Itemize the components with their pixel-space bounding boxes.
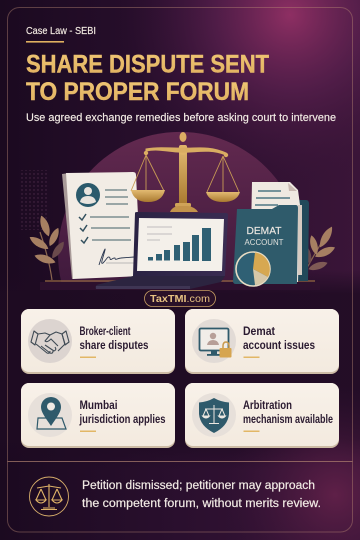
accent rule [244,430,260,432]
icon: handshake [28,319,72,363]
folder: demat account: ACCOUNT [244,238,284,247]
card text [243,400,333,426]
panel: broker-client [21,309,175,374]
card text: account issues [243,340,315,352]
accent rule [244,356,260,358]
subtitle: Use agreed exchange remedies before asking court to intervene [26,112,336,124]
card text: Broker-client [80,326,131,338]
icon: shield with scales [192,393,236,437]
title: SHARE DISPUTE SENT [26,50,269,78]
table surface [45,280,315,282]
folder: demat account [233,182,309,286]
conclusion text [82,480,321,510]
card text: Demat [243,326,275,338]
accent rule [80,356,96,358]
card text [243,326,315,352]
folder label: DEMAT [246,225,282,237]
panel: conclusion [8,462,352,516]
icon: right leaves [303,225,337,272]
card text: Mumbai [80,400,118,412]
brand pill: TaxTMI .com [150,294,210,305]
title [26,50,269,106]
halo circle [58,132,302,282]
panel: arbitration [185,383,339,448]
card text: share disputes [80,340,148,352]
panel: mumbai jurisdiction [21,383,175,448]
document with avatar [62,172,141,279]
header [26,26,336,124]
accent rule [80,430,96,432]
conclusion text: Petition dismissed; petitioner may approach [82,480,315,492]
card text [80,326,148,352]
card text: jurisdiction applies [79,414,166,426]
brand pill [144,290,216,306]
panel: demat issues [185,309,339,374]
icon: left leaves [28,214,67,280]
hero illustration [28,132,337,290]
icon: monitor and lock [192,319,236,363]
card text [79,400,166,426]
laptop with chart [96,212,228,289]
category label: Case Law - SEBI [26,26,96,37]
icon: balance scale [131,132,240,212]
card text: Arbitration [243,400,292,412]
title: TO PROPER FORUM [26,78,249,106]
conclusion text: the competent forum, without merits review. [82,498,321,510]
signature [99,249,134,265]
gold rule [26,41,64,43]
pie chart [236,252,270,286]
card text: mechanism available [243,414,333,426]
icon: scales badge [30,477,68,516]
icon: map pin [28,393,72,437]
